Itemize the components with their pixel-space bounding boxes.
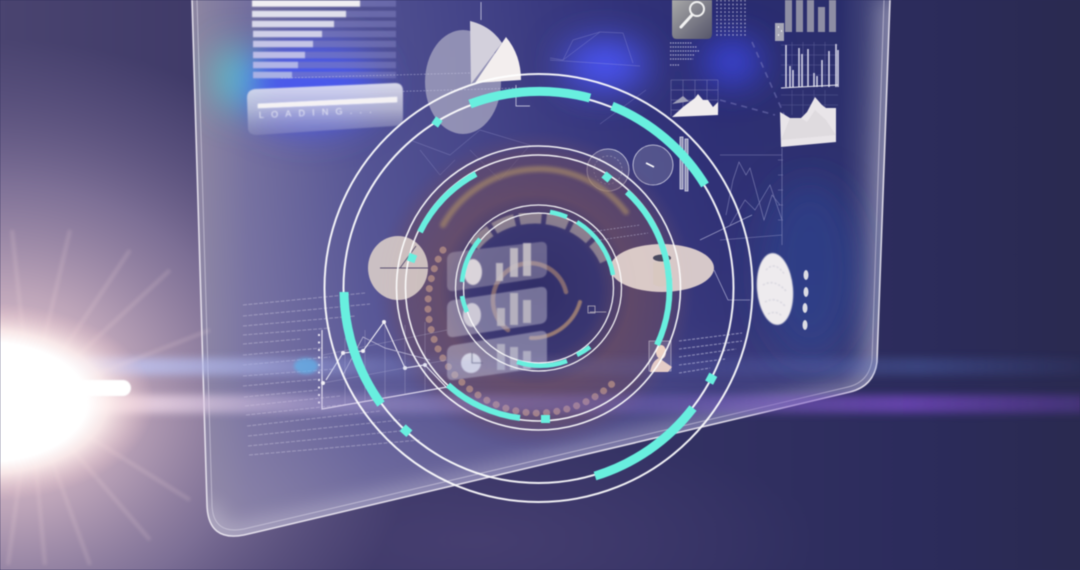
lens flare xyxy=(0,230,210,565)
dashed connector xyxy=(720,42,790,128)
loading box xyxy=(247,83,403,135)
fingerprint dots xyxy=(802,270,808,330)
area chart: large xyxy=(780,90,838,147)
panel: glass tablet xyxy=(192,0,890,536)
bar chart: top right xyxy=(775,0,836,41)
column line chart xyxy=(781,42,838,88)
disc chart xyxy=(610,215,752,300)
card: top xyxy=(447,242,547,291)
pie chart: left xyxy=(368,236,428,300)
loading box: LOADING... xyxy=(259,105,379,120)
card: bottom xyxy=(447,331,547,380)
icon: person xyxy=(649,341,672,372)
bar list xyxy=(252,4,396,75)
small text block xyxy=(670,43,700,65)
cyan segments xyxy=(344,91,705,476)
area chart: small xyxy=(671,80,718,117)
line chart: right xyxy=(720,148,783,245)
dot grid xyxy=(717,0,745,38)
ring gauge xyxy=(324,74,752,502)
glow: center halo xyxy=(375,130,695,450)
glow: panel blue and teal lights xyxy=(218,40,860,360)
gauges xyxy=(587,137,688,191)
text block: right xyxy=(679,333,742,373)
light streaks xyxy=(0,358,1080,413)
white rings xyxy=(324,74,752,502)
dashboard cards xyxy=(447,242,547,380)
icon: fingerprint xyxy=(754,252,796,326)
cyan markers xyxy=(400,116,717,437)
line chart: left xyxy=(319,320,447,409)
icon: magnifier tile xyxy=(672,0,712,39)
card: middle xyxy=(447,287,547,337)
text block: upper center xyxy=(281,73,648,240)
text block: left xyxy=(243,293,420,455)
pie chart: large xyxy=(425,2,530,134)
orange glow arcs xyxy=(428,169,626,413)
network lines xyxy=(410,32,646,180)
